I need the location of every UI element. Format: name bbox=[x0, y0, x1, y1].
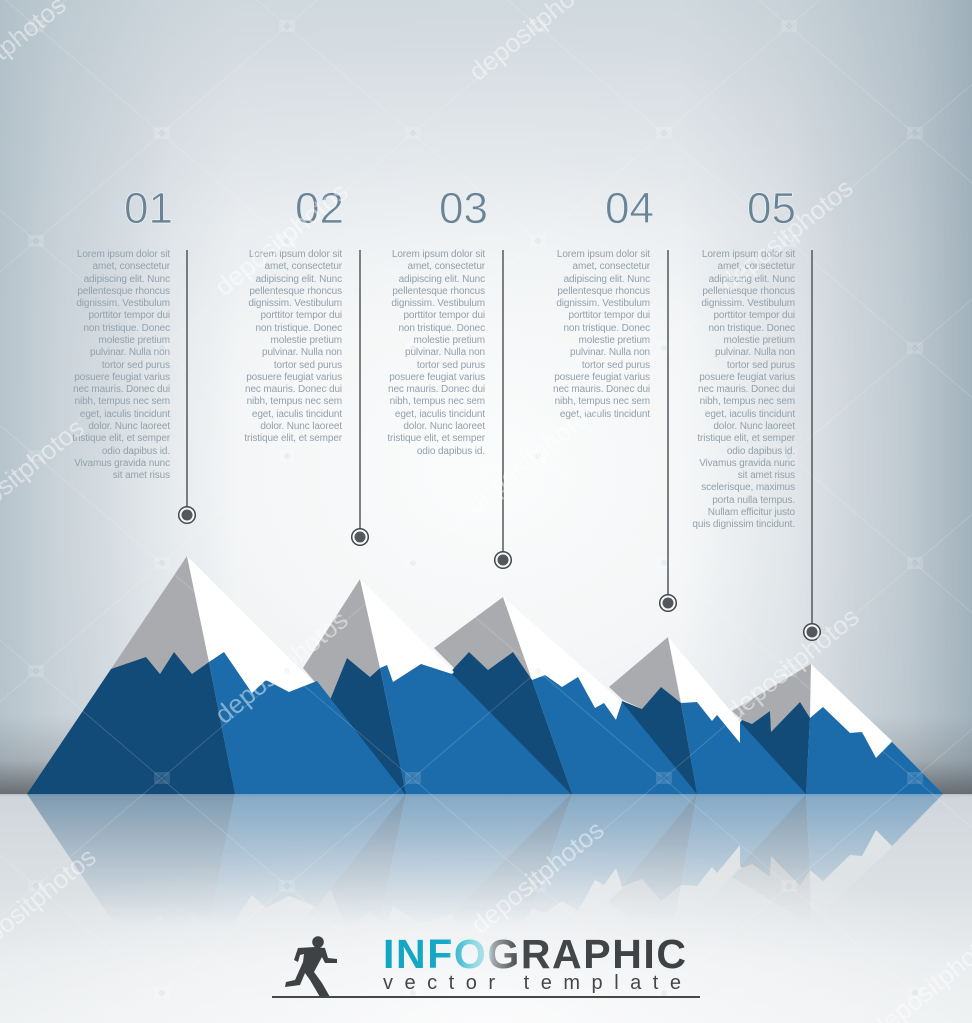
text block 03: tortor sed purus bbox=[417, 360, 485, 371]
text block 01: tristique elit, et semper bbox=[72, 433, 170, 444]
text block 05: dignissim. Vestibulum bbox=[701, 298, 795, 309]
text block 04: porttitor tempor dui bbox=[568, 310, 650, 321]
text block 02: eget, iaculis tincidunt bbox=[252, 409, 342, 420]
text block 04: amet, consectetur bbox=[573, 261, 650, 272]
text block 05: quis dignissim tincidunt. bbox=[692, 519, 795, 530]
text block 03: Lorem ipsum dolor sit bbox=[392, 249, 485, 260]
text block 05 bbox=[692, 249, 796, 530]
text block 05: pulvinar. Nulla non bbox=[715, 347, 795, 358]
pin 02 bbox=[352, 250, 368, 545]
baseline rule bbox=[272, 996, 700, 998]
text block 03: posuere feugiat varius bbox=[389, 372, 485, 383]
text block 01: nibh, tempus nec sem bbox=[75, 396, 170, 407]
text block 05: Lorem ipsum dolor sit bbox=[702, 249, 795, 260]
text block 03: tristique elit, et semper bbox=[387, 433, 485, 444]
text block 01: non tristique. Donec bbox=[83, 323, 170, 334]
text block 03: nibh, tempus nec sem bbox=[390, 396, 485, 407]
text block 03: nec mauris. Donec dui bbox=[388, 384, 485, 395]
text block 02: tortor sed purus bbox=[274, 360, 342, 371]
text block 05: Vivamus gravida nunc bbox=[699, 458, 795, 469]
text block 03: eget, iaculis tincidunt bbox=[395, 409, 485, 420]
pin 03 bbox=[495, 250, 511, 568]
text block 02: pellentesque rhoncus bbox=[249, 286, 342, 297]
text block 05: sit amet risus bbox=[738, 470, 795, 481]
text block 03: pellentesque rhoncus bbox=[392, 286, 485, 297]
text block 04: eget, iaculis tincidunt bbox=[560, 409, 650, 420]
text block 03: odio dapibus id. bbox=[417, 446, 485, 456]
text block 01: Lorem ipsum dolor sit bbox=[77, 249, 170, 260]
text block 04: molestie pretium bbox=[579, 335, 650, 346]
text block 05: non tristique. Donec bbox=[708, 323, 795, 334]
text block 03: dolor. Nunc laoreet bbox=[403, 421, 485, 432]
number 01: 01 bbox=[124, 184, 173, 233]
pin 05 bbox=[804, 250, 820, 640]
text block 02: porttitor tempor dui bbox=[260, 310, 342, 321]
text block 02: posuere feugiat varius bbox=[246, 372, 342, 383]
text block 01: adipiscing elit. Nunc bbox=[84, 274, 170, 285]
text block 04: adipiscing elit. Nunc bbox=[564, 274, 650, 285]
text block 04: nibh, tempus nec sem bbox=[555, 396, 650, 407]
pin 01 bbox=[179, 250, 195, 523]
text block 01: sit amet risus bbox=[113, 470, 170, 481]
text block 05: eget, iaculis tincidunt bbox=[705, 409, 795, 420]
text block 01: odio dapibus id. bbox=[102, 446, 170, 456]
text block 05: adipiscing elit. Nunc bbox=[709, 274, 795, 285]
depositphotos watermarks: depositphotos bbox=[460, 394, 605, 520]
depositphotos watermarks: depositphotos bbox=[465, 814, 610, 940]
mountains bbox=[27, 556, 943, 794]
text block 05: tortor sed purus bbox=[727, 360, 795, 371]
text block 02: amet, consectetur bbox=[265, 261, 342, 272]
text block 02: molestie pretium bbox=[271, 335, 342, 346]
text block 05: porta nulla tempus. bbox=[712, 495, 795, 506]
text block 01: eget, iaculis tincidunt bbox=[80, 409, 170, 420]
text block 05: pellentesque rhoncus bbox=[702, 286, 795, 297]
text block 01: nec mauris. Donec dui bbox=[73, 384, 170, 395]
text block 02: non tristique. Donec bbox=[255, 323, 342, 334]
text block 05: nec mauris. Donec dui bbox=[698, 384, 795, 395]
text block 05: Nullam efficitur justo bbox=[708, 507, 795, 518]
depositphotos watermarks: depositphotos bbox=[720, 601, 865, 727]
text block 03: amet, consectetur bbox=[408, 261, 485, 272]
text block 04: pellentesque rhoncus bbox=[557, 286, 650, 297]
text block 02: dignissim. Vestibulum bbox=[248, 298, 342, 309]
text block 02: Lorem ipsum dolor sit bbox=[249, 249, 342, 260]
text block 05: molestie pretium bbox=[724, 335, 795, 346]
text block 02: tristique elit, et semper bbox=[244, 433, 342, 444]
number 03: 03 bbox=[439, 184, 488, 233]
depositphotos watermarks: depositphotos bbox=[209, 176, 354, 302]
text block 04: Lorem ipsum dolor sit bbox=[557, 249, 650, 260]
text block 03 bbox=[387, 249, 486, 456]
text block 03: dignissim. Vestibulum bbox=[391, 298, 485, 309]
text block 04: pulvinar. Nulla non bbox=[570, 347, 650, 358]
text block 05: nibh, tempus nec sem bbox=[700, 396, 795, 407]
text block 01: porttitor tempor dui bbox=[88, 310, 170, 321]
pin 04 bbox=[660, 250, 676, 611]
mountain reflection bbox=[27, 794, 943, 912]
text block 01: tortor sed purus bbox=[102, 360, 170, 371]
text block 04 bbox=[553, 249, 650, 420]
depositphotos watermarks: depositphotos bbox=[714, 172, 859, 298]
text block 04: nec mauris. Donec dui bbox=[553, 384, 650, 395]
text block 01: amet, consectetur bbox=[93, 261, 170, 272]
number 04: 04 bbox=[605, 184, 654, 233]
text block 03: molestie pretium bbox=[414, 335, 485, 346]
text block 01: molestie pretium bbox=[99, 335, 170, 346]
icon: running man bbox=[285, 936, 337, 997]
text block 05: dolor. Nunc laoreet bbox=[713, 421, 795, 432]
text block 02: nibh, tempus nec sem bbox=[247, 396, 342, 407]
text block 03: non tristique. Donec bbox=[398, 323, 485, 334]
text block 02: nec mauris. Donec dui bbox=[245, 384, 342, 395]
title: INFOGRAPHIC bbox=[383, 931, 686, 977]
text block 02 bbox=[244, 249, 342, 444]
text block 05: posuere feugiat varius bbox=[699, 372, 795, 383]
number 05: 05 bbox=[747, 184, 796, 233]
text block 01: posuere feugiat varius bbox=[74, 372, 170, 383]
text block 03: pulvinar. Nulla non bbox=[405, 347, 485, 358]
text block 03: porttitor tempor dui bbox=[403, 310, 485, 321]
text block 05: tristique elit, et semper bbox=[697, 433, 795, 444]
text block 01: Vivamus gravida nunc bbox=[74, 458, 170, 469]
text block 02: pulvinar. Nulla non bbox=[262, 347, 342, 358]
text block 05: scelerisque, maximus bbox=[701, 482, 795, 493]
text block 02: dolor. Nunc laoreet bbox=[260, 421, 342, 432]
background wall bbox=[0, 0, 972, 794]
reflective floor bbox=[0, 794, 972, 1023]
text block 01: dolor. Nunc laoreet bbox=[88, 421, 170, 432]
text block 02: adipiscing elit. Nunc bbox=[256, 274, 342, 285]
text block 05: odio dapibus id. bbox=[727, 446, 795, 456]
subtitle: vector template bbox=[383, 972, 681, 994]
text block 01: pellentesque rhoncus bbox=[77, 286, 170, 297]
text block 05: porttitor tempor dui bbox=[713, 310, 795, 321]
text block 04: tortor sed purus bbox=[582, 360, 650, 371]
text block 03: adipiscing elit. Nunc bbox=[399, 274, 485, 285]
text block 05: amet, consectetur bbox=[718, 261, 795, 272]
text block 01: pulvinar. Nulla non bbox=[90, 347, 170, 358]
text block 01 bbox=[72, 249, 170, 481]
depositphotos watermarks: depositphotos bbox=[209, 604, 354, 730]
text block 04: posuere feugiat varius bbox=[554, 372, 650, 383]
text block 01: dignissim. Vestibulum bbox=[76, 298, 170, 309]
text block 04: dignissim. Vestibulum bbox=[556, 298, 650, 309]
text block 04: non tristique. Donec bbox=[563, 323, 650, 334]
number 02: 02 bbox=[295, 184, 344, 233]
